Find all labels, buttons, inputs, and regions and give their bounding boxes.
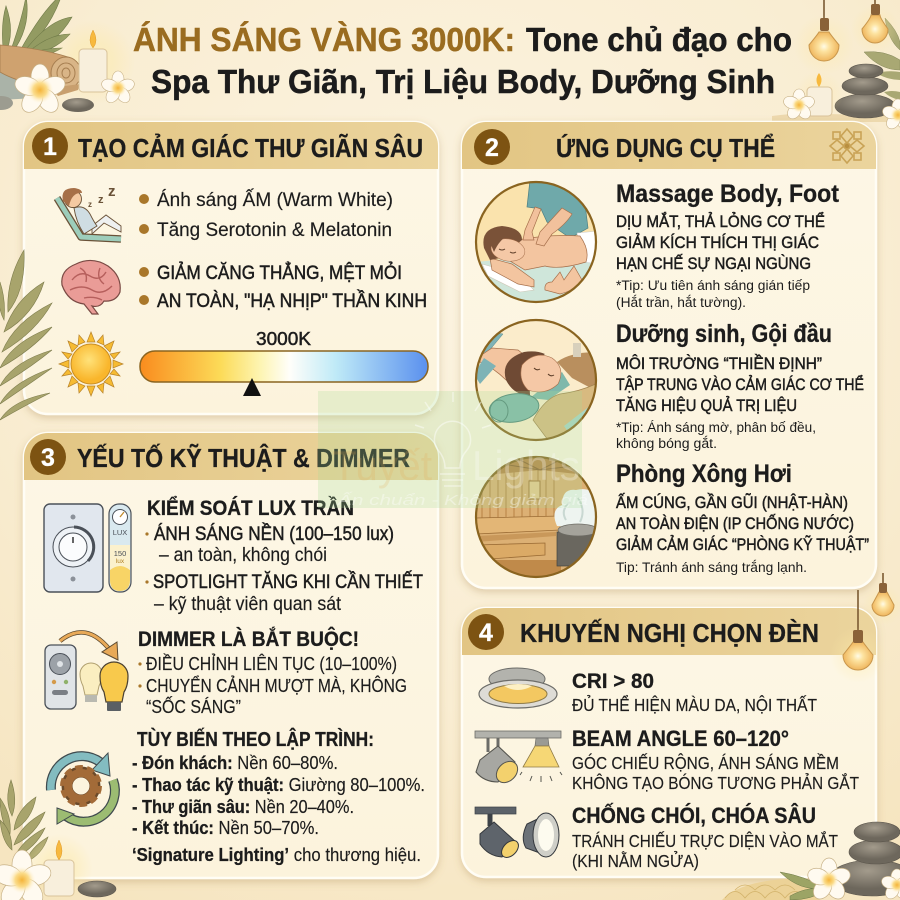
panel 1 header: TẠO CẢM GIÁC THƯ GIÃN SÂU xyxy=(78,133,423,163)
text block: anti-glare: CHỐNG CHÓI, CHÓA SÂU xyxy=(572,802,816,828)
decoration: right-side hanging bulbs xyxy=(830,573,900,683)
watermark: Ấn chuẩn - Không giảm giá xyxy=(337,491,588,509)
bullet list: nervous system xyxy=(139,262,427,312)
text block: head spa: *Tip: Ánh sáng mờ, phân bố đều, xyxy=(616,420,816,435)
icon: anti-glare spotlight xyxy=(475,807,559,861)
text block: sauna: Phòng Xông Hơi xyxy=(616,460,792,488)
text block: CRI: ĐỦ THỂ HIỆN MÀU DA, NỘI THẤT xyxy=(572,694,817,715)
illustration: sauna xyxy=(476,457,598,580)
panel 2 header xyxy=(462,122,876,169)
icon: downlight xyxy=(479,668,557,708)
decoration: top-left spa still life xyxy=(0,0,136,116)
text block: ceiling lux control: ÁNH SÁNG NỀN (100–150 lux) xyxy=(154,523,394,545)
text block: programming presets xyxy=(132,727,425,865)
decoration: top-right bulbs and stones xyxy=(772,0,900,131)
panel 1: relaxation xyxy=(24,122,438,414)
icon: resting person: z xyxy=(88,200,92,209)
icon: sun xyxy=(59,332,123,396)
text block: dimmer required: “SỐC SÁNG” xyxy=(146,696,241,717)
icon: resting person: z xyxy=(98,194,104,206)
decoration: left palm leaves xyxy=(0,250,52,420)
title: ÁNH SÁNG VÀNG 3000K: xyxy=(133,21,515,58)
text block: head spa xyxy=(616,320,864,451)
color temperature scale xyxy=(140,329,428,396)
text block: ceiling lux control: – kỹ thuật viên quan sát xyxy=(154,594,342,615)
text block: sauna: AN TOÀN ĐIỆN (IP CHỐNG NƯỚC) xyxy=(616,513,854,533)
text block: programming presets: - Đón khách: Nền 60–80%. xyxy=(132,753,338,773)
panel 3: technical factors xyxy=(24,433,438,878)
panel 4 header: 4 xyxy=(479,619,493,647)
icon: lux meter xyxy=(109,504,131,592)
text block: CRI: CRI > 80 xyxy=(572,670,654,693)
text block: massage body foot: *Tip: Ưu tiên ánh sáng gián tiếp xyxy=(616,278,810,293)
icon: programming cycle xyxy=(51,753,115,824)
text block: beam angle xyxy=(572,726,859,793)
text block: ceiling lux control: – an toàn, không chói xyxy=(159,545,327,566)
text block: beam angle: GÓC CHIẾU RỘNG, ÁNH SÁNG MỀM xyxy=(572,752,839,773)
illustration: body massage xyxy=(476,180,598,302)
panel 3 header: 3 xyxy=(41,444,55,472)
panel 4 header xyxy=(462,608,876,655)
icon: resting person xyxy=(57,183,121,239)
panel 4: fixture recommendations xyxy=(462,608,876,877)
bullet list: nervous system: GIẢM CĂNG THẲNG, MỆT MỎI xyxy=(157,262,402,284)
arrow: remote to bulb xyxy=(60,632,118,660)
text block: head spa: MÔI TRƯỜNG “THIỀN ĐỊNH” xyxy=(616,354,822,373)
text block: programming presets: ‘Signature Lighting’ cho thương hiệu. xyxy=(132,844,421,865)
watermark xyxy=(318,391,588,509)
bullet list: warm light xyxy=(139,189,393,241)
text block: massage body foot: GIẢM KÍCH THÍCH THỊ GIÁC xyxy=(616,233,819,252)
text block: massage body foot: HẠN CHẾ SỰ NGẠI NGÙNG xyxy=(616,254,811,273)
icon: resting person: z xyxy=(108,183,116,200)
icon: ornament xyxy=(830,129,864,163)
title: Spa Thư Giãn, Trị Liệu Body, Dưỡng Sinh xyxy=(151,63,775,100)
text block: CRI xyxy=(572,670,817,715)
title xyxy=(133,21,792,100)
text block: massage body foot: DỊU MẮT, THẢ LỎNG CƠ THỂ xyxy=(616,212,825,231)
text block: anti-glare: TRÁNH CHIẾU TRỰC DIỆN VÀO MẮT xyxy=(572,830,838,851)
text block: massage body foot: Massage Body, Foot xyxy=(616,180,840,208)
icon: lux meter: lux xyxy=(116,558,125,565)
panel 1 header xyxy=(24,122,438,169)
panel 3 header xyxy=(24,433,438,480)
icon: lux meter: LUX xyxy=(113,528,127,537)
panel 4 header: KHUYẾN NGHỊ CHỌN ĐÈN xyxy=(520,618,819,648)
illustration: head spa xyxy=(474,320,600,440)
text block: head spa: không bóng gắt. xyxy=(616,436,717,451)
icon: dim and bright bulbs xyxy=(80,662,128,711)
text block: programming presets: - Thư giãn sâu: Nền 20–40%. xyxy=(132,797,354,817)
title: Tone chủ đạo cho xyxy=(526,21,792,58)
text block: ceiling lux control xyxy=(145,497,423,615)
text block: dimmer required: DIMMER LÀ BẮT BUỘC! xyxy=(138,627,359,651)
text block: dimmer required xyxy=(138,627,407,717)
bullet list: warm light: Ánh sáng ẤM (Warm White) xyxy=(157,189,393,211)
text block: dimmer required: ĐIỀU CHỈNH LIÊN TỤC (10–100%) xyxy=(146,653,397,674)
color temperature scale: 3000K xyxy=(256,329,311,349)
text block: ceiling lux control: KIỂM SOÁT LUX TRẦN xyxy=(147,497,354,520)
text block: sauna xyxy=(616,460,869,575)
text block: programming presets: - Kết thúc: Nền 50–70%. xyxy=(132,818,319,838)
text block: anti-glare: (KHI NẰM NGỬA) xyxy=(572,850,699,871)
text block: dimmer required: CHUYỂN CẢNH MƯỢT MÀ, KHÔNG xyxy=(146,675,407,696)
panel 2 header: ỨNG DỤNG CỤ THỂ xyxy=(556,133,775,163)
text block: head spa: TĂNG HIỆU QUẢ TRỊ LIỆU xyxy=(616,396,797,415)
text block: massage body foot xyxy=(616,180,840,310)
text block: programming presets: TÙY BIẾN THEO LẬP TRÌNH: xyxy=(137,727,374,751)
panel 2 header: 2 xyxy=(485,134,499,162)
icon: wall dimmer xyxy=(44,504,103,592)
bullet list: warm light: Tăng Serotonin & Melatonin xyxy=(157,220,392,241)
watermark: Lights xyxy=(472,442,580,489)
text block: programming presets: - Thao tác kỹ thuật: Giường 80–100%. xyxy=(132,775,425,795)
text block: beam angle: BEAM ANGLE 60–120° xyxy=(572,726,789,751)
text block: massage body foot: (Hắt trần, hắt tường). xyxy=(616,295,746,310)
icon: wide beam track lights xyxy=(475,731,562,787)
panel 3 header: YẾU TỐ KỸ THUẬT & DIMMER xyxy=(77,443,410,473)
text block: ceiling lux control: SPOTLIGHT TĂNG KHI CẦN THIẾT xyxy=(153,571,423,593)
text block: sauna: Tip: Tránh ánh sáng trắng lạnh. xyxy=(616,559,807,575)
text block: anti-glare xyxy=(572,802,838,871)
bullet list: nervous system: AN TOÀN, "HẠ NHỊP" THẦN KINH xyxy=(157,290,427,312)
text block: beam angle: KHÔNG TẠO BÓNG TƯƠNG PHẢN GẮT xyxy=(572,772,859,793)
icon: remote control xyxy=(45,645,76,709)
panel 1 header: 1 xyxy=(43,133,57,161)
decoration: bottom-right stones and flowers xyxy=(722,822,900,900)
decoration: bottom-left candle and flower xyxy=(0,780,116,900)
text block: head spa: Dưỡng sinh, Gội đầu xyxy=(616,320,832,348)
icon: brain xyxy=(62,260,120,314)
icon: lux meter: 150 xyxy=(114,549,126,558)
text block: sauna: ẤM CÚNG, GẦN GŨI (NHẬT-HÀN) xyxy=(616,493,848,512)
panel 2: applications xyxy=(462,122,876,588)
watermark: Tuyết xyxy=(332,442,432,489)
